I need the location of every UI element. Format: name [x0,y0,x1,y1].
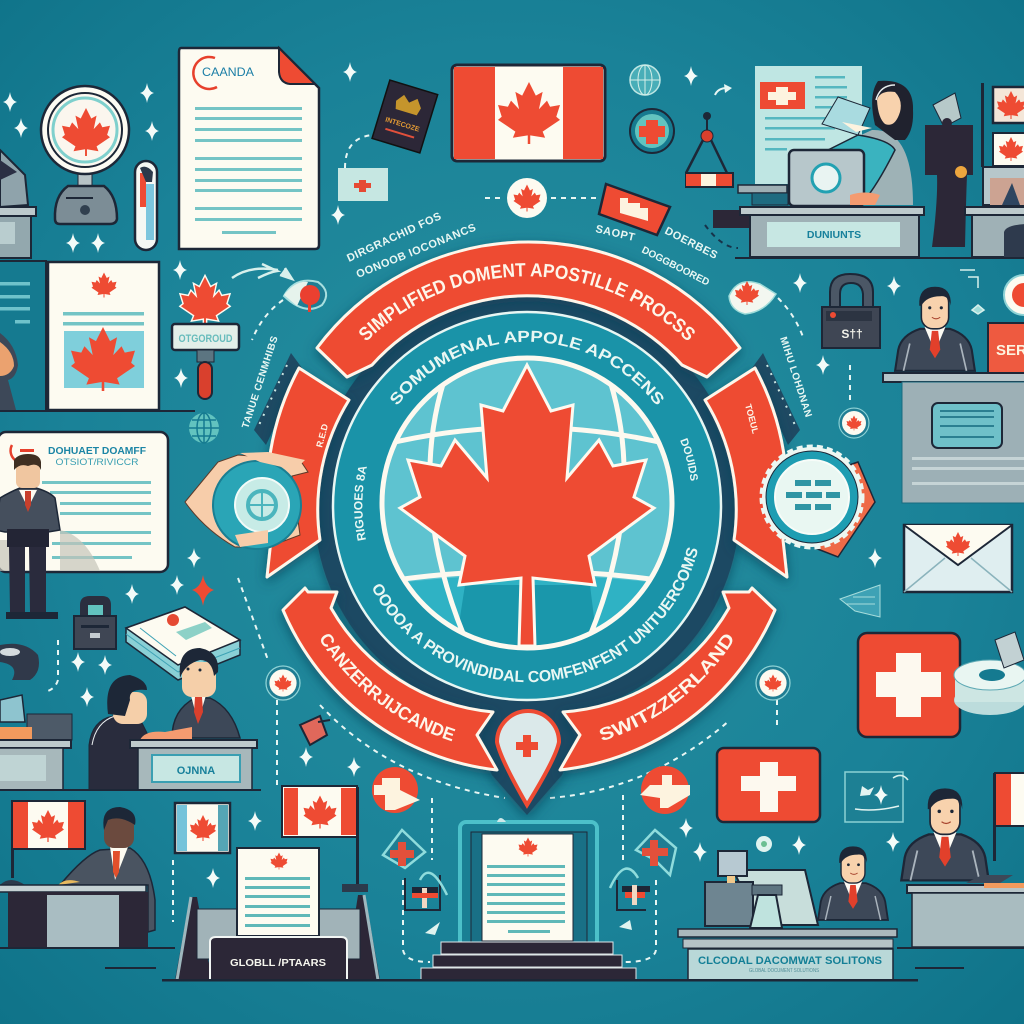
curved captions above ribbon: DOGGBOORED [640,245,711,288]
podium: global affairs: GLOBLL /PTAARS [230,958,326,969]
dark bands behind side ribbons [254,353,800,445]
ring: teal text ring: OOOOA A PROVINDIDAL COMFENFENT UNITUERCOMS [373,548,698,682]
flag: large Swiss [858,633,960,737]
red sparkle [192,575,214,606]
connector dashes [44,135,850,962]
curved captions above ribbon: DOERBES [663,225,720,262]
ring: teal text ring: DOUIDS [680,438,698,481]
icon: small globe top [630,65,660,95]
desk scene: bottom left man [0,807,175,969]
icon: small tool [300,716,330,745]
icon: red cross circle [630,109,674,153]
desk scene: presenter and document left: OTSIOT/RIVICCR [56,457,139,467]
icon: envelope [904,525,1012,592]
ribbon: left [267,368,349,577]
floor line bottom [162,979,918,982]
sign: service [988,323,1024,373]
desk scene: global document solutions [678,846,897,980]
podium: global affairs [175,848,380,980]
ribbon: right [705,368,787,577]
ribbon: left: R.E.D [314,422,330,449]
panel: notes and hand at left edge [0,261,46,411]
arrow: swoop top-left [232,264,292,279]
icon: black device left [0,644,39,680]
icon: small envelope card [338,168,388,201]
ring: teal text ring [332,310,722,702]
ribbon: top [312,238,744,386]
icon: speed arrow [840,585,880,617]
curved captions above ribbon: TANUE CENMHIBS [240,334,281,430]
orb: lower right [756,666,790,700]
icon: small orb right of ribbon [729,281,776,314]
ribbon: top: SIMPLIFIED DOMENT APOSTILLE PROCSS [359,263,695,340]
desk scene: global document solutions: CLCODAL DACOMWAT SOLITONS [698,955,882,967]
ring: teal text ring: SOMUMENAL APPOLE APCCENS [390,330,664,404]
icon: magnifier with maple leaf [41,86,129,224]
floor line mid left [0,789,261,791]
service counter [883,373,1024,503]
podium: central document [421,818,636,980]
hand holding seal [185,452,308,549]
icon: broken flag orb left [372,767,420,813]
ribbon: bottom right: SWITZZERLAND [600,634,732,740]
desk scene: presenter and document left: DOHUAET DOAMFF [48,446,146,457]
icon: small arrows right [960,270,984,314]
central ribbons shadow ring [314,293,740,815]
icon: centre leaf circle [507,178,547,218]
icon: book [372,80,438,153]
sparkles [3,62,901,888]
crane icon [686,84,733,187]
icon: lock: S†† [841,327,863,341]
desk scene: woman at laptop: DUNIUNTS [807,229,861,241]
document: maple leaf sheet [48,262,159,410]
icon: teal frame [845,772,908,822]
desk scene: woman at laptop [713,66,1024,259]
globe [382,358,672,650]
icon: small lock left [74,596,116,649]
flag: top Canada flag [452,65,605,161]
icon: lock [822,274,880,348]
icon: right edge orb [1004,275,1024,315]
curved captions above ribbon: MIHU LOHDNAN [777,336,814,419]
icon: pen [135,161,157,250]
flag: centre left Canada flag [282,786,359,887]
ribbon: bottom left [278,586,499,779]
ribbon: bottom right [558,586,780,780]
curved captions above ribbon: OONOOB IOCONANCS [355,222,478,281]
icon: broken flag orb right [640,766,690,814]
icon: red tag [599,184,670,235]
desk scene: global document solutions: GLOBAL DOCUMENT SOLUTIONS [749,968,820,974]
flag: small Swiss [717,748,820,822]
desk scene: two men and OJNNA counter: OJNNA [177,765,215,777]
icon: clipped desk top-left [0,150,36,258]
icon: leaf stamp: OTGOROUD [178,333,233,345]
floor line under panels [0,410,195,412]
desk scene: post and frames right [925,83,1024,257]
icon: book: INTECOZE [384,117,420,134]
pin marker [497,711,559,805]
icon: tape roll [954,632,1024,715]
seal badge right [762,447,875,557]
ring: teal text ring: RIGUOES 8A [354,466,367,541]
icon: leaf stamp [172,277,239,399]
icon: stack of cards [126,607,240,680]
flag: bottom left Canada flag [11,800,85,878]
desk scene: left edge counter [0,695,72,790]
flag: bottom left small [175,803,230,853]
curved captions above ribbon: SAOPT [594,223,636,244]
ribbon: bottom left: CANZERRJIJCANDE [321,634,456,742]
desk scene: bottom right man [897,773,1024,969]
person: service man [895,287,975,371]
document: Canada letter [179,48,319,249]
icon: small globe left [189,413,219,443]
desk scene: two men and OJNNA counter [89,648,257,790]
curved captions above ribbon [240,210,814,430]
icon: small orb with balloon [284,281,326,312]
desk scene: presenter and document left [0,432,168,619]
ribbon: right: TOEUL [743,403,761,435]
document: Canada letter: CAANDA [202,67,254,79]
central maple leaf [400,365,654,646]
icon: leaf orb right [839,408,869,438]
curved captions above ribbon: DIRGRACHID FOS [345,210,444,265]
orb: lower left [266,666,300,700]
icons: small envelopes and arcs [383,830,772,935]
